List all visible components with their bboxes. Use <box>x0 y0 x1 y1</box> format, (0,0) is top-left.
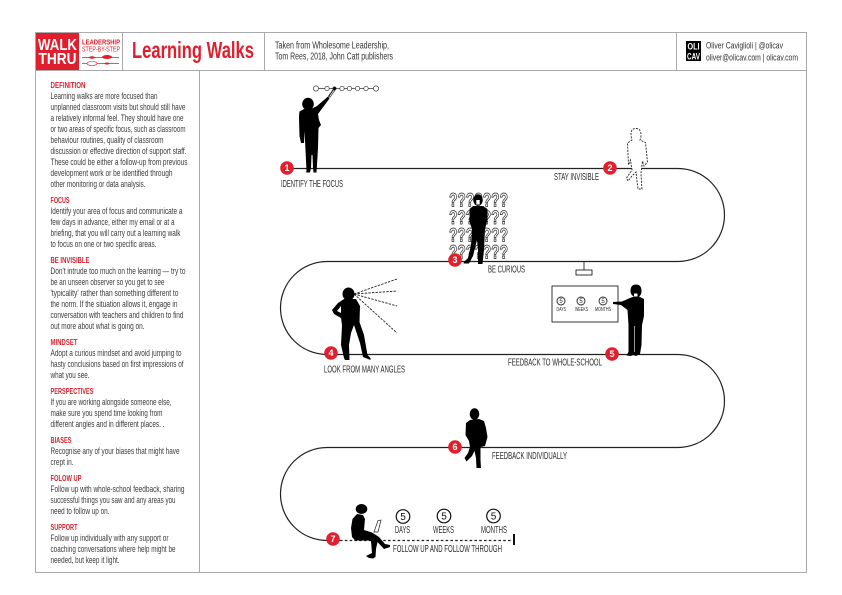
dashed follow-through line <box>340 534 515 545</box>
author contact: Oliver Caviglioli | @olicav <box>706 40 783 52</box>
label: identify the focus: IDENTIFY THE FOCUS <box>281 179 343 190</box>
figure 3: curious person with question marks <box>449 190 508 264</box>
step marker 7 <box>326 532 340 546</box>
perspectives section: different angles and in different places. . <box>50 419 164 429</box>
logo: walk thru <box>36 33 120 70</box>
figure 6: person with folded arm walking <box>464 408 488 468</box>
logo: walk thru: LEADERSHIP <box>82 38 120 46</box>
support section: coaching conversations where help might be <box>50 544 176 554</box>
source text: Taken from Wholesome Leadership, <box>275 40 389 52</box>
definition section: DEFINITION <box>50 81 86 90</box>
timeline: weeks <box>433 509 454 536</box>
be invisible section <box>50 256 186 331</box>
author logo: OLI <box>688 42 700 52</box>
follow up section: FOLOW UP <box>50 474 82 483</box>
definition section: behaviour routines, quality of classroom <box>50 135 164 145</box>
figure 2: invisible dashed outline person <box>626 128 648 189</box>
label: stay invisible: STAY INVISIBLE <box>554 172 599 183</box>
mindset section: what you see. <box>50 370 90 380</box>
author logo: CAV <box>687 52 700 62</box>
perspectives section <box>50 387 172 429</box>
timeline: months: 5 <box>491 512 497 522</box>
timeline: weeks: 5 <box>441 512 447 522</box>
whiteboard: 5 <box>601 299 605 305</box>
question mark grid <box>449 190 508 264</box>
whiteboard: 5 <box>559 299 563 305</box>
source text <box>275 40 393 62</box>
follow up section: Follow up with whole-school feedback, sharing <box>50 484 184 494</box>
support section: Follow up individually with any support or <box>50 533 168 543</box>
timeline: days <box>395 510 410 536</box>
support section: SUPPORT <box>50 523 78 532</box>
sight rays <box>354 279 397 333</box>
focus section <box>50 196 182 249</box>
mindset section <box>50 338 184 380</box>
laptop <box>374 520 381 532</box>
logo: walk thru: STEP-BY-STEP <box>82 44 120 54</box>
figure 1: presenter pointing at chain <box>299 86 379 172</box>
focus section: FOCUS <box>50 196 70 205</box>
step marker 3 <box>448 253 462 267</box>
figure 5: presenter at whiteboard <box>613 284 644 356</box>
logo: walk thru: THRU <box>38 51 76 68</box>
be invisible section: Don't intrude too much on the learning — try to <box>50 266 186 276</box>
focus section: few days in advance, either my email or at a <box>50 217 174 227</box>
focus section: Identify your area of focus and communicate a <box>50 206 182 216</box>
author logo <box>686 41 701 62</box>
follow up section <box>50 474 184 516</box>
author contact: oliver@olicav.com | olicav.com <box>706 52 798 64</box>
timeline: days: 5 <box>400 512 406 523</box>
step marker 6: 6 <box>452 442 458 452</box>
mindset section: MINDSET <box>50 338 78 347</box>
definition section: development work or be identified through <box>50 168 172 178</box>
step marker 4 <box>324 346 338 360</box>
support section: needed, but keep it light. <box>50 555 120 565</box>
definition section: other monitoring or data analysis. <box>50 179 146 189</box>
step marker 5 <box>605 347 619 361</box>
perspectives section: make sure you spend time looking from <box>50 408 162 418</box>
label: be curious: BE CURIOUS <box>488 264 525 276</box>
be invisible section: BE INVISIBLE <box>50 256 90 265</box>
biases section: Recognise any of your biases that might have <box>50 446 180 456</box>
question mark grid: ??????? <box>449 242 508 264</box>
step marker 4: 4 <box>328 348 334 358</box>
winding path <box>280 168 724 540</box>
be invisible section: out more about what is going on. <box>50 321 144 331</box>
perspectives section: If you are working alongside someone else, <box>50 397 172 407</box>
definition section: unplanned classroom visits but should still have <box>50 102 186 112</box>
author contact <box>706 40 798 64</box>
be invisible section: 'typicality' rather than something different to <box>50 288 178 298</box>
step marker 1 <box>280 161 294 175</box>
follow up section: need to follow up on. <box>50 506 110 516</box>
definition section: a relatively informal feel. They should have one <box>50 113 184 123</box>
mindset section: Adopt a curious mindset and avoid jumping to <box>50 348 182 358</box>
step marker 5: 5 <box>609 349 615 359</box>
be invisible section: the norm. If the situation allows it, engage in <box>50 299 178 309</box>
title: Learning Walks <box>132 37 254 63</box>
logo: walk thru: WALK <box>38 37 78 54</box>
timeline: weeks: WEEKS <box>433 525 454 536</box>
definition section: discussion or effective direction of support staff. <box>50 146 186 156</box>
mindset section: hasty conclusions based on first impressions of <box>50 359 184 369</box>
question mark grid: ??????? <box>449 226 508 246</box>
definition section: Learning walks are more focused than <box>50 91 158 101</box>
whiteboard <box>552 286 618 322</box>
figure 4: person looking from many angles <box>332 279 397 360</box>
icon: chain of circles <box>313 86 379 91</box>
label: look from many angles: LOOK FROM MANY ANGLES <box>324 364 405 376</box>
biases section: crept in. <box>50 457 74 467</box>
timeline: days: DAYS <box>395 525 410 536</box>
support section <box>50 523 176 565</box>
step marker 2: 2 <box>607 163 613 173</box>
source text: Tom Rees, 2018, John Catt publishers <box>275 52 393 62</box>
whiteboard: DAYS <box>556 307 566 313</box>
step marker 3: 3 <box>452 255 458 265</box>
step marker 7: 7 <box>330 534 336 544</box>
be invisible section: conversation with teachers and children to find <box>50 310 184 320</box>
label: follow up and follow through: FOLLOW UP AND FOLLOW THROUGH <box>393 544 502 555</box>
figure 7: person on laptop seated <box>351 504 390 558</box>
question mark grid: ??????? <box>449 190 508 212</box>
question mark grid: ??????? <box>449 208 508 229</box>
projector <box>576 261 592 275</box>
definition section: or two areas of specific focus, such as classroom <box>50 124 186 134</box>
follow up section: successful things you saw and any areas you <box>50 495 176 505</box>
whiteboard: 5 <box>579 299 583 305</box>
timeline: months <box>481 509 507 536</box>
timeline: months: MONTHS <box>481 525 507 536</box>
focus section: to focus on one or two specific areas. <box>50 239 156 249</box>
definition section: These could be either a follow-up from previous <box>50 157 188 167</box>
step marker 1: 1 <box>284 163 290 173</box>
biases section: BIASES <box>50 436 72 445</box>
biases section <box>50 436 180 467</box>
step marker 2 <box>603 161 617 175</box>
focus section: briefing, that you will carry out a learning walk <box>50 228 181 238</box>
be invisible section: be an unseen observer so you get to see <box>50 277 164 287</box>
whiteboard: WEEKS <box>575 307 588 313</box>
panel: sidebar text <box>50 81 188 565</box>
definition section <box>50 81 188 189</box>
perspectives section: PERSPECTIVES <box>50 387 94 396</box>
step marker 6 <box>448 440 462 454</box>
whiteboard: MONTHS <box>595 307 611 313</box>
label: feedback individually: FEEDBACK INDIVIDUALLY <box>492 451 567 462</box>
label: feedback to whole-school: FEEDBACK TO WHOLE-SCHOOL <box>508 358 602 368</box>
